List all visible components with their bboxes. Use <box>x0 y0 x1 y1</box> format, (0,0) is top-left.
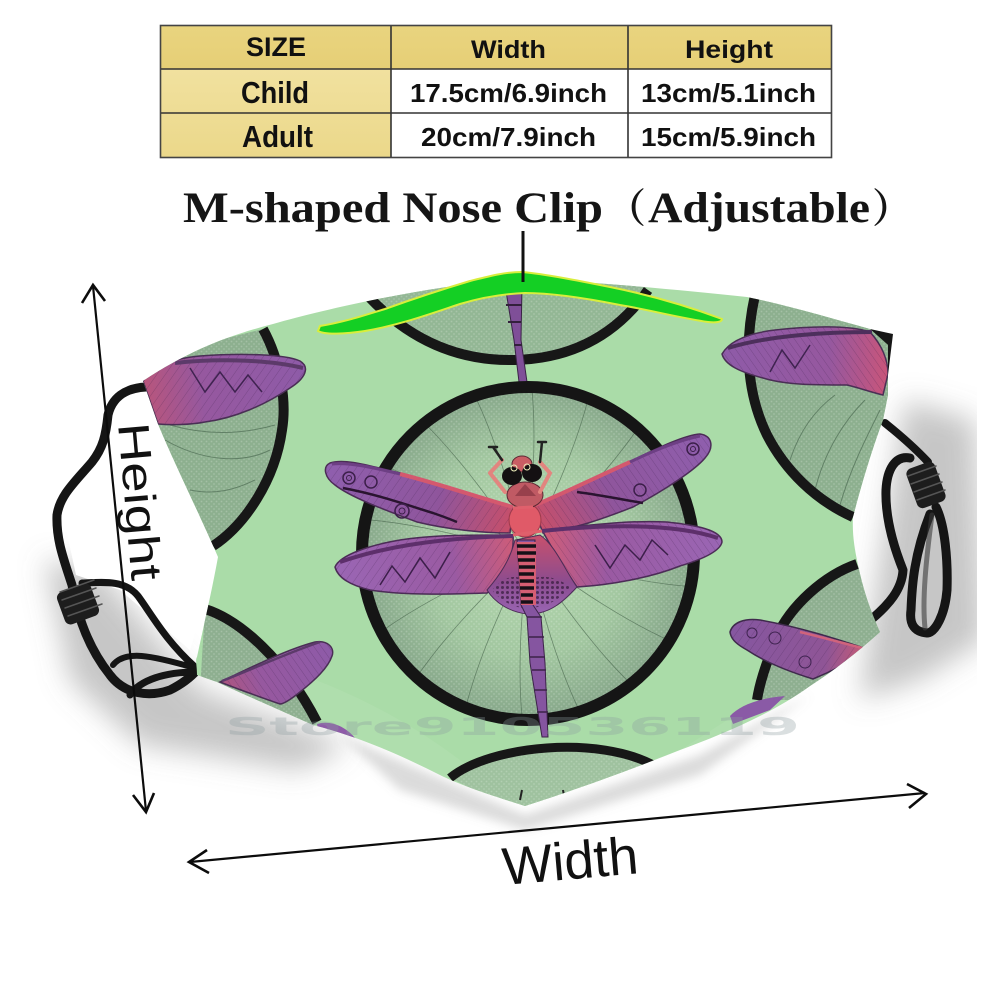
prothorax <box>507 482 543 508</box>
right ear strap <box>873 423 947 633</box>
height label: Height <box>108 421 171 582</box>
lower left wing <box>335 535 513 594</box>
mask shadow <box>45 400 985 830</box>
nose clip <box>318 272 722 334</box>
side wing: upper right <box>722 327 888 395</box>
left toggle <box>55 580 102 626</box>
left ear white gap <box>62 395 218 650</box>
hind lobe <box>487 535 577 614</box>
central dragonfly <box>325 434 722 737</box>
size table: 13cm/5.1inch <box>641 78 816 108</box>
size table <box>160 25 832 158</box>
top dragonfly disc <box>366 283 652 365</box>
mask pattern <box>143 283 888 806</box>
width arrow <box>189 784 926 873</box>
side wing: lower left <box>220 642 333 704</box>
upper right wing <box>533 434 711 533</box>
side wing: small lower left <box>317 723 355 738</box>
head <box>502 456 542 485</box>
heading: nose clip: （ <box>606 186 646 231</box>
lower left disc <box>200 609 317 740</box>
size table: Width <box>471 36 546 64</box>
right toggle <box>905 460 947 510</box>
watermark: Store910536119 <box>225 712 800 741</box>
size table: 15cm/5.9inch <box>641 122 816 152</box>
wing joint bars <box>513 507 542 535</box>
heading: nose clip: M-shaped Nose Clip <box>183 185 603 232</box>
nose clip pointer <box>522 231 524 282</box>
height arrow <box>82 285 154 812</box>
left ear strap <box>55 387 197 695</box>
thorax <box>509 503 541 537</box>
right disc <box>749 295 900 517</box>
heading: nose clip <box>183 185 912 232</box>
size table: Child <box>241 75 309 110</box>
heading: nose clip: ） <box>872 186 912 231</box>
upper left wing <box>325 461 513 533</box>
size table: 17.5cm/6.9inch <box>410 78 607 108</box>
left disc <box>140 329 284 546</box>
size table: SIZE <box>246 32 306 62</box>
width label: Width <box>500 826 641 897</box>
central disc <box>358 382 696 724</box>
lower right wing <box>542 522 722 587</box>
side wing: small lower right <box>730 696 785 724</box>
side wing: lower right <box>730 620 870 679</box>
legs <box>489 442 550 492</box>
mask body <box>143 283 888 806</box>
right corner tab <box>870 329 893 375</box>
top dragonfly tail <box>506 294 528 382</box>
heading: nose clip: Adjustable <box>648 185 870 232</box>
size table: Adult <box>242 119 313 154</box>
bottom disc <box>450 747 655 815</box>
size table: 20cm/7.9inch <box>421 122 596 152</box>
lower right disc <box>757 564 890 700</box>
side wing: upper left <box>143 354 305 425</box>
size table: Height <box>685 36 774 64</box>
abdomen <box>517 540 548 737</box>
